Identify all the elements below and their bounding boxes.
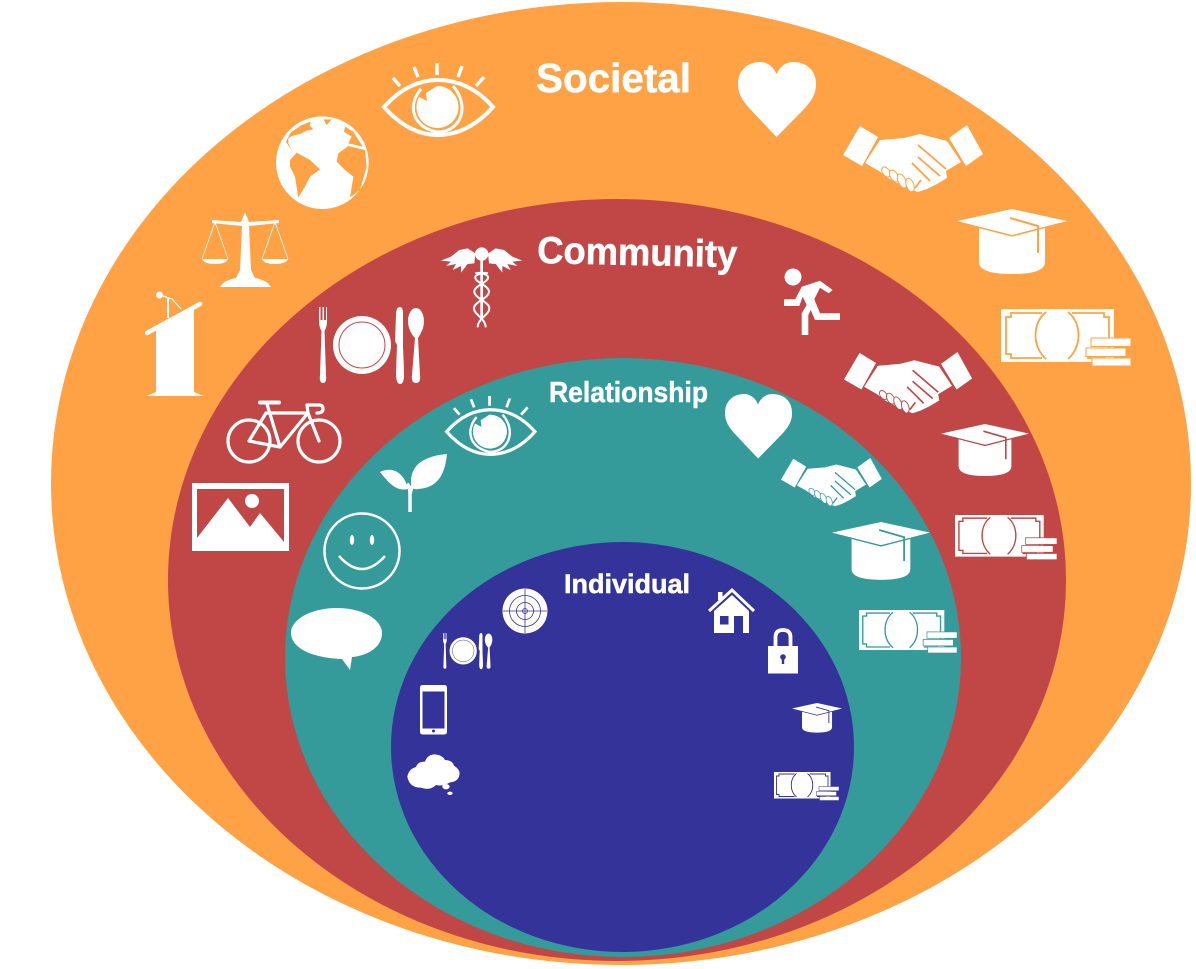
icon: place setting xyxy=(319,307,424,384)
circle: individual xyxy=(391,542,854,952)
icon: money xyxy=(1001,309,1131,366)
circle: relationship xyxy=(285,358,961,957)
icon: graduation cap xyxy=(941,424,1029,476)
societal icons xyxy=(146,62,1131,396)
individual icons xyxy=(407,588,842,800)
heading: Community: Community xyxy=(537,230,738,276)
icon: bicycle xyxy=(228,402,340,462)
icon: eye xyxy=(384,63,493,135)
icon: money xyxy=(774,772,839,800)
icon: house xyxy=(709,590,754,633)
heading: Societal: Societal xyxy=(536,55,691,101)
icon: globe xyxy=(276,116,369,209)
circle: community xyxy=(168,199,1066,961)
icon: caduceus xyxy=(441,247,522,327)
icon: handshake xyxy=(781,458,882,507)
icon: graduation cap xyxy=(792,703,842,733)
heading: Relationship: Relationship xyxy=(549,377,708,409)
icon: heart xyxy=(738,62,816,137)
icon: graduation cap xyxy=(832,522,930,580)
icon: scales of justice xyxy=(202,212,288,287)
icon: target xyxy=(502,588,548,634)
icon: graduation cap xyxy=(957,209,1067,274)
icon: heart xyxy=(725,394,792,458)
icon: sprout xyxy=(380,454,447,512)
community icons xyxy=(192,247,1057,560)
icon: landscape picture xyxy=(192,483,289,551)
icon: running person xyxy=(784,268,840,335)
relationship icons xyxy=(291,394,957,670)
icon: smiley face xyxy=(324,514,400,588)
icon: thought cloud xyxy=(407,754,460,795)
icon: handshake xyxy=(844,352,972,414)
icon: smartphone xyxy=(420,685,447,734)
icon: eye xyxy=(447,396,535,454)
icon: padlock xyxy=(768,630,798,674)
icon: handshake xyxy=(843,125,983,193)
icon: place setting xyxy=(443,633,492,669)
heading: Individual: Individual xyxy=(564,569,690,599)
icon: money xyxy=(859,610,957,653)
icon: speech bubble xyxy=(291,608,382,670)
icon: money xyxy=(955,515,1057,560)
icon: podium xyxy=(146,292,204,396)
